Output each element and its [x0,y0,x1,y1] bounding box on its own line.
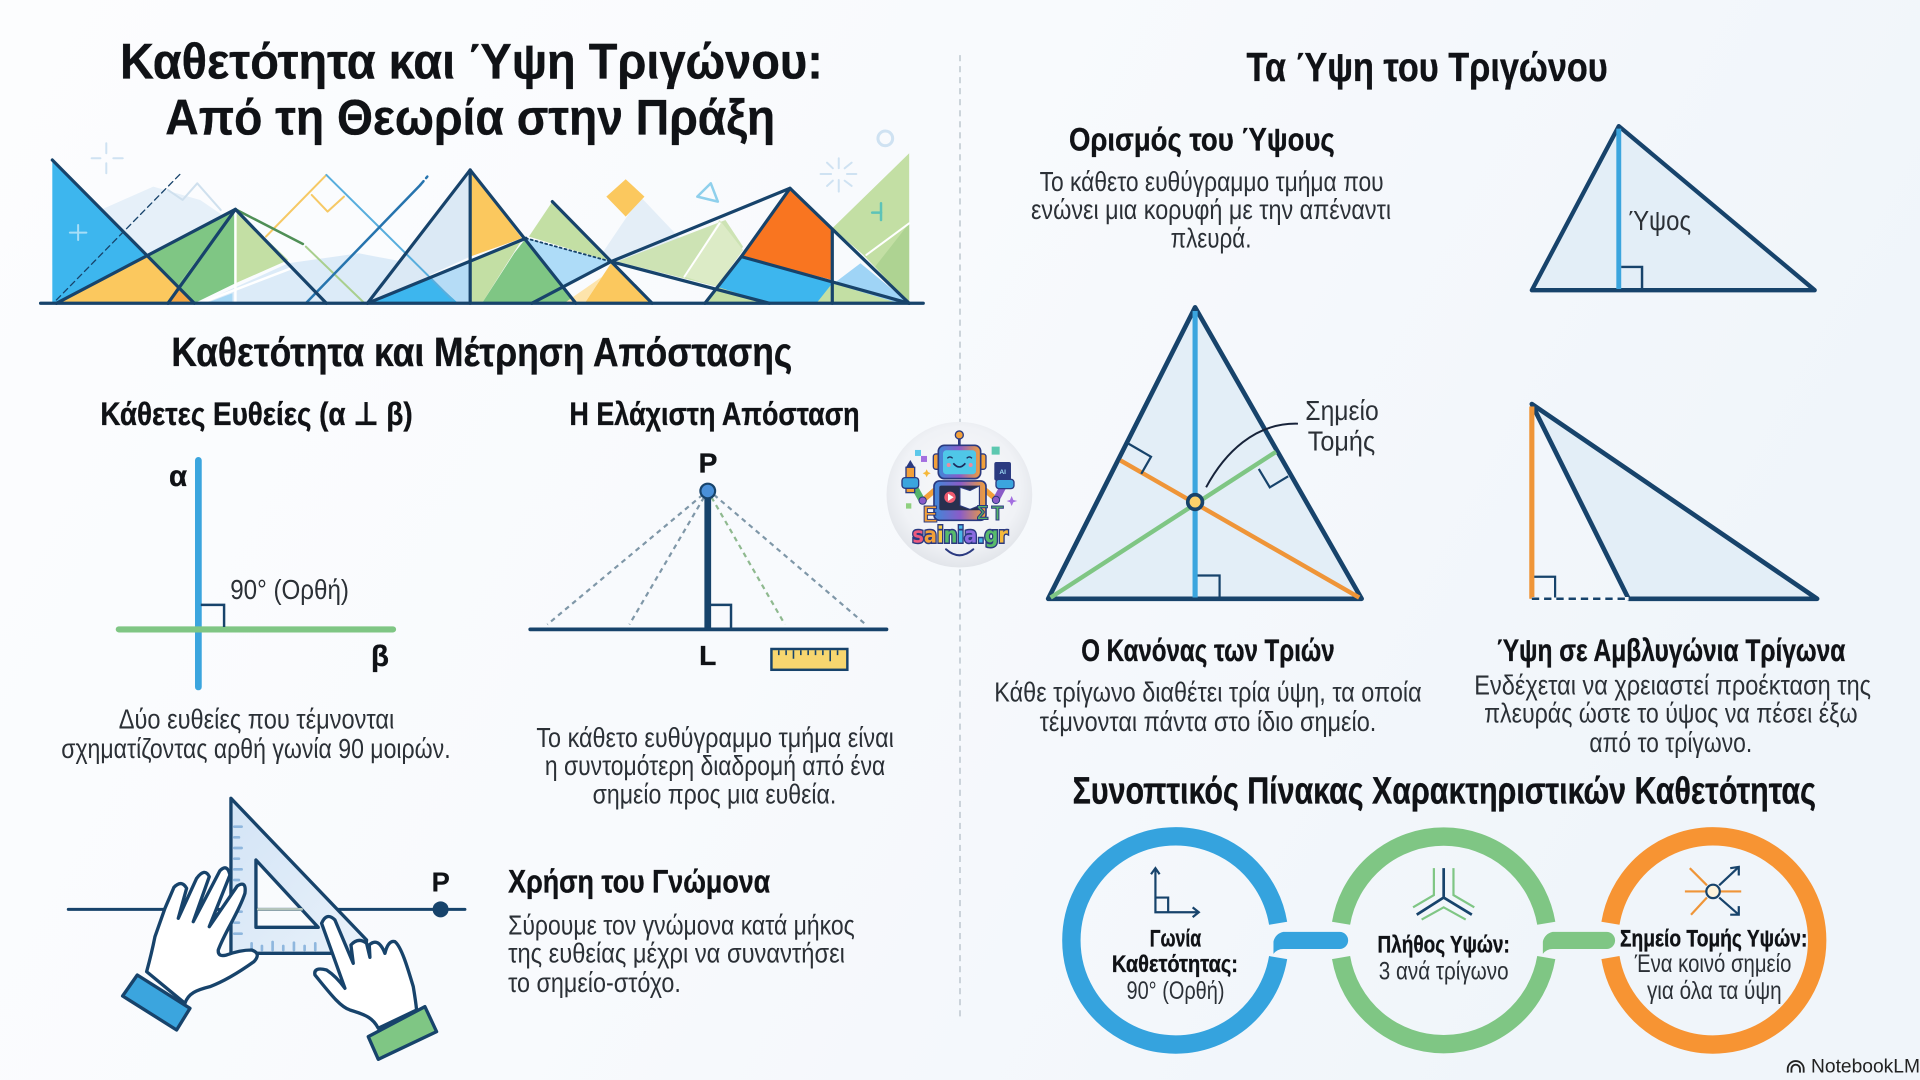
diagram: triangle altitude: Ύψος [1629,205,1691,236]
subheading: perpendicular lines: Κάθετες Ευθείες (α ⊥ β) [100,396,413,432]
logo: sainia.gr robot [887,422,1032,568]
text: shortest distance: σημείο προς μια ευθεία. [593,778,836,809]
panel: intersection point circle [1610,836,1817,1044]
text block: using the set square: της ευθείας μέχρι να συναντήσει [508,937,845,968]
text block: using the set square: Σύρουμε τον γνώμονα κατά μήκος [508,909,855,940]
panel: right angle circle: 90° (Ορθή) [1127,977,1224,1005]
panel: right angle circle: Γωνία [1150,926,1201,953]
panel: right angle circle: Καθετότητας: [1112,951,1238,978]
title: Καθετότητα και Ύψη Τριγώνου: [120,33,823,89]
text block: rule of three: Ο Κανόνας των Τριών [1081,633,1335,668]
text: perpendicular definition: σχηματίζοντας αρθή γωνία 90 μοιρών. [61,733,451,764]
logo: sainia.gr robot: Τ [991,503,1004,525]
panel: perpendicular lines [61,396,451,764]
text block: using the set square: Χρήση του Γνώμονα [508,864,770,900]
text block: altitudes in obtuse triangles: πλευράς ώστε το ύψος να πέσει έξω [1484,697,1858,728]
icon: right angle [1151,868,1199,917]
panel: right angle circle [1071,836,1348,1044]
geometric triangles banner [41,143,923,303]
text: shortest distance [536,722,894,809]
diagram: triangle altitude [1532,126,1815,290]
panel: number of altitudes circle: 3 ανά τρίγωνο [1379,958,1509,986]
text block: rule of three: τέμνονται πάντα στο ίδιο σημείο. [1040,706,1376,737]
heading: altitudes of the triangle: Τα Ύψη του Τριγώνου [1247,44,1608,90]
illustration: hands with set square [68,798,465,1059]
icon: three altitudes [1413,868,1474,920]
diagram: shortest distance: P [699,448,717,479]
diagram: shortest distance [530,448,887,671]
diagram: obtuse triangle altitude [1532,404,1817,599]
panel: intersection point circle: Σημείο Τομής Υψών: [1620,926,1807,953]
connector: green [1543,932,1615,954]
text block: definition of altitude: πλευρά. [1171,222,1251,253]
logo: sainia.gr robot: AI [999,469,1006,476]
text block: definition of altitude: ενώνει μια κορυφή με την απέναντι [1031,194,1391,225]
text: perpendicular definition [61,704,451,764]
text block: altitudes in obtuse triangles [1474,633,1871,758]
illustration: hands with set square: P [432,867,450,898]
title: Από τη Θεωρία στην Πράξη [165,90,775,146]
diagram: perpendicular lines: β [371,640,389,673]
diagram: three altitudes meeting at a point: Σημείο [1305,395,1379,426]
text block: using the set square [508,864,855,998]
heading: perpendicularity and distance: Καθετότητα και Μέτρηση Απόστασης [171,329,792,375]
icon: intersection point [1685,867,1741,915]
text block: using the set square: το σημείο-στόχο. [508,967,681,998]
text: shortest distance: Το κάθετο ευθύγραμμο τμήμα είναι [536,722,894,753]
text: perpendicular definition: Δύο ευθείες που τέμνονται [119,704,394,735]
text block: rule of three [994,633,1422,737]
panel: intersection point circle: για όλα τα ύψη [1647,977,1782,1005]
icon: left hand [123,868,257,1030]
decorative ring [878,131,893,146]
text block: definition of altitude: Ορισμός του Ύψους [1069,122,1335,158]
diagram: perpendicular lines [119,460,393,687]
icon: ruler [771,649,847,670]
text block: altitudes in obtuse triangles: από το τρίγωνο. [1589,727,1752,758]
diagram: three altitudes meeting at a point: Τομής [1308,426,1375,457]
title [120,33,823,146]
subheading: shortest distance: Η Ελάχιστη Απόσταση [569,396,860,432]
text block: rule of three: Κάθε τρίγωνο διαθέτει τρία ύψη, τα οποία [994,677,1422,708]
text: shortest distance: η συντομότερη διαδρομή από ένα [545,750,885,781]
logo: sainia.gr robot: Ε [923,501,938,527]
text block: definition of altitude: Το κάθετο ευθύγραμμο τμήμα που [1040,166,1384,197]
connector: blue [1273,932,1348,954]
diagram: three altitudes meeting at a point [1048,307,1379,599]
panel: number of altitudes circle [1341,837,1615,1044]
icon: right hand [315,917,437,1059]
panel: number of altitudes circle: Πλήθος Υψών: [1378,932,1510,959]
logo: sainia.gr robot: Σ [977,502,989,524]
diagram: perpendicular lines: 90° (Ορθή) [230,574,349,605]
diagram: perpendicular lines: α [169,460,187,493]
diagram: shortest distance: L [699,640,716,671]
text block: definition of altitude [1031,122,1391,253]
watermark: NotebookLM: NotebookLM [1811,1056,1920,1078]
panel: intersection point circle: Ένα κοινό σημείο [1634,950,1791,978]
panel: shortest distance [530,396,894,809]
logo: sainia.gr robot: sainia.gr [912,523,1008,548]
